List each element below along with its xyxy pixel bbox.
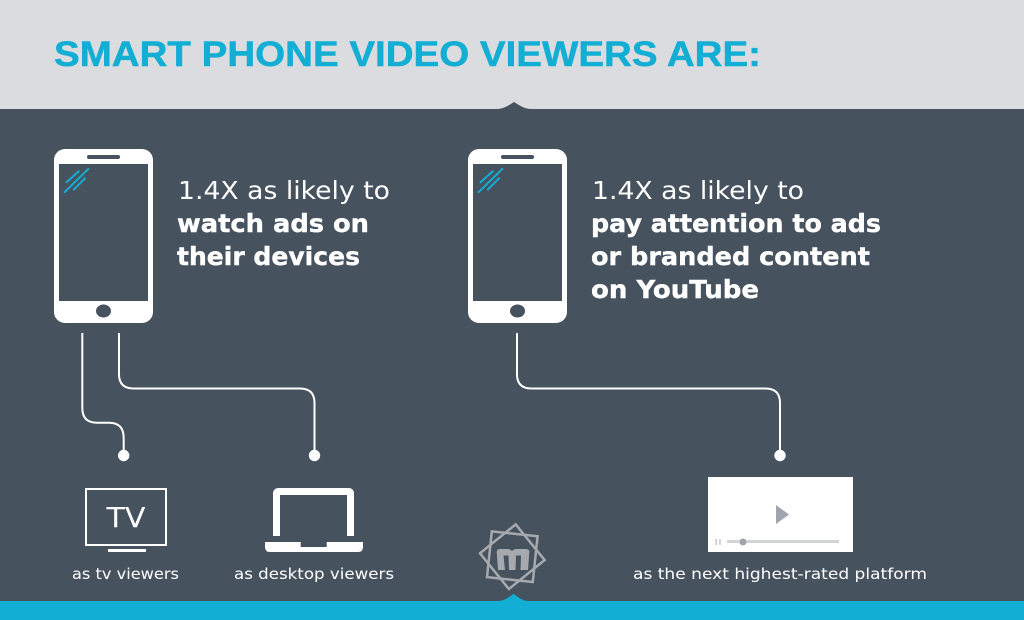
icon: tv: TV — [105, 501, 146, 534]
right phone text: 1.4X as likely to — [592, 176, 804, 205]
title: SMART PHONE VIDEO VIEWERS ARE: — [54, 35, 761, 74]
desktop label: as desktop viewers — [234, 565, 394, 583]
left phone text: 1.4X as likely to — [178, 176, 390, 205]
footer band — [0, 594, 1024, 620]
connector: phone to desktop — [119, 333, 320, 461]
icon: laptop — [265, 492, 363, 552]
right phone text: pay attention to ads — [591, 209, 881, 238]
icon: tv — [86, 489, 166, 552]
right phone text: on YouTube — [591, 275, 759, 304]
icon: right phone — [468, 149, 567, 323]
left phone text: watch ads on — [177, 209, 369, 238]
connector: phone to video platform — [517, 333, 786, 461]
video player — [708, 477, 853, 552]
video platform label: as the next highest-rated platform — [633, 565, 927, 583]
left phone text — [177, 176, 390, 271]
header band — [0, 0, 1024, 109]
right phone text: or branded content — [591, 242, 870, 271]
right phone text — [591, 176, 881, 304]
tv label: as tv viewers — [72, 565, 179, 583]
left phone text: their devices — [177, 242, 360, 271]
icon: logo — [480, 524, 545, 589]
connector: phone to tv — [82, 333, 129, 461]
icon: left phone — [54, 149, 153, 323]
